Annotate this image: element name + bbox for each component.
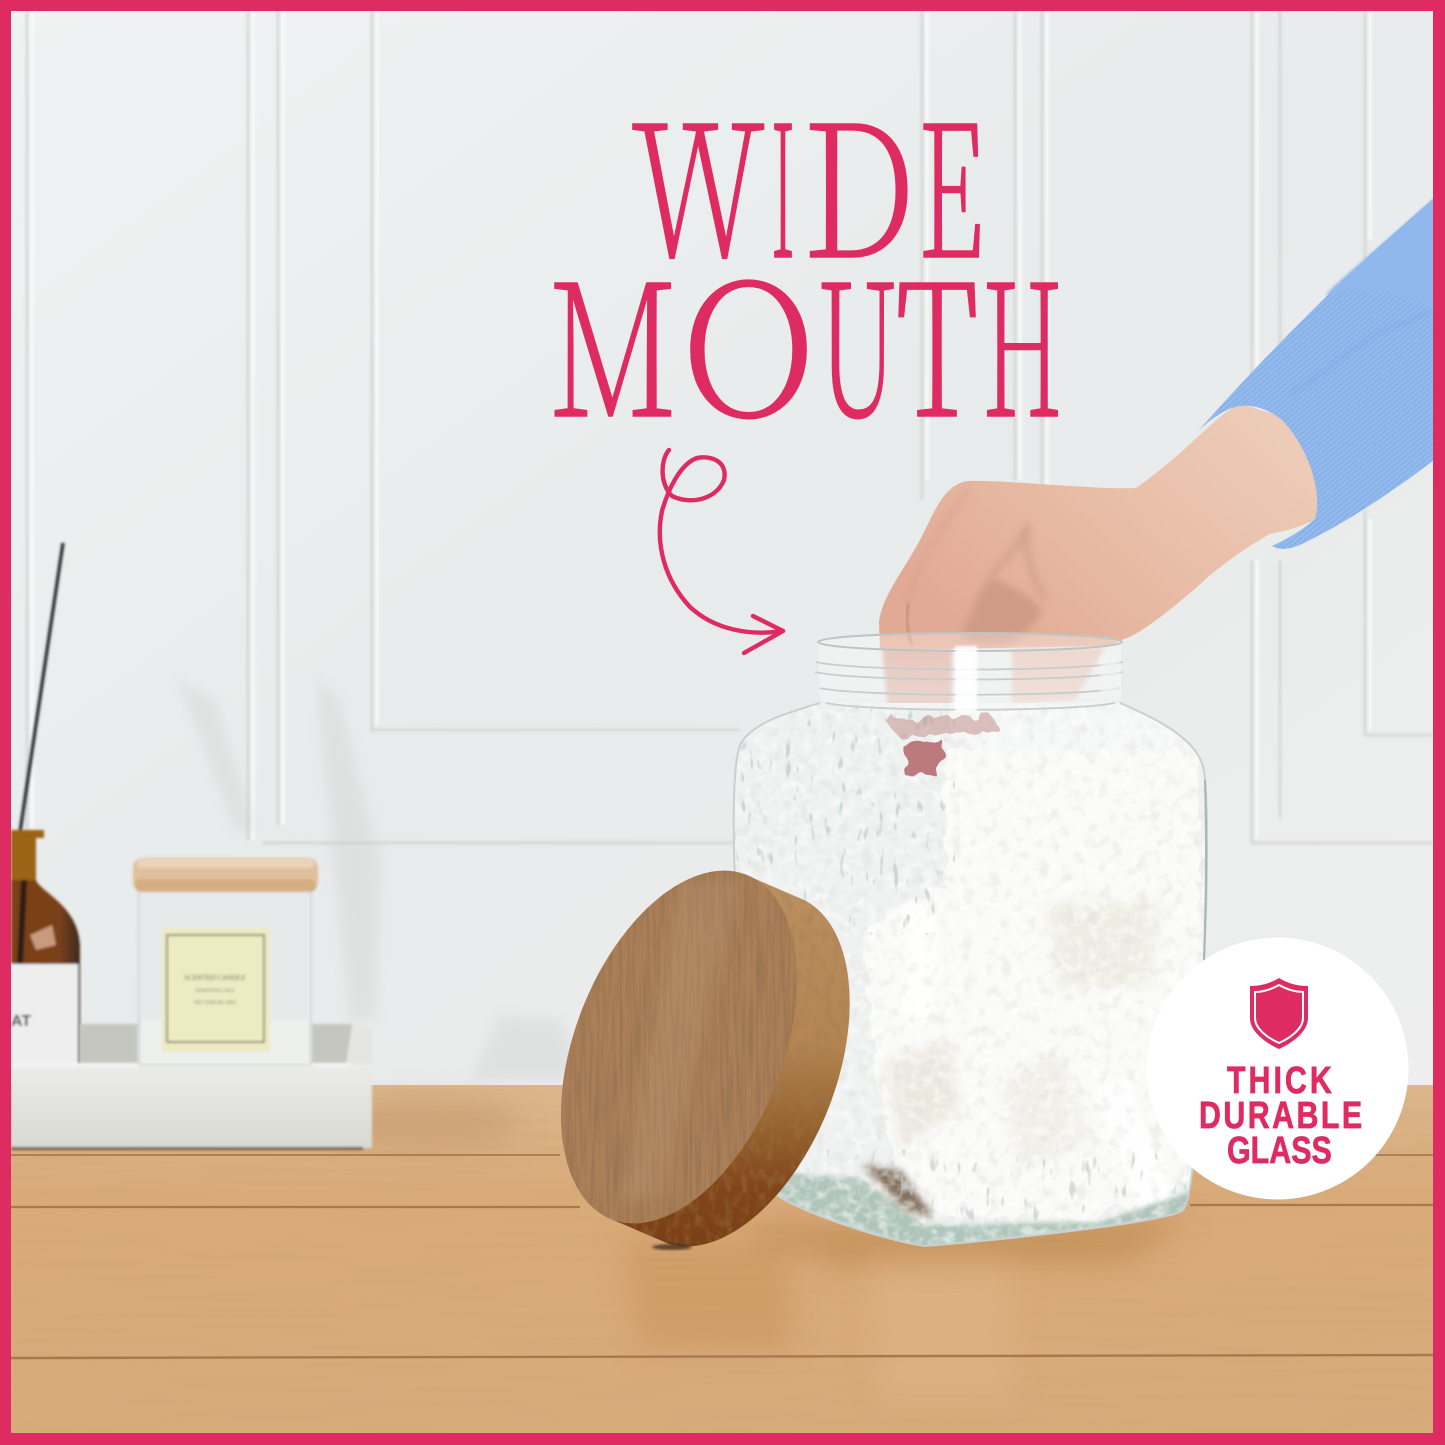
title: wide mouth xyxy=(549,45,1063,469)
icon: shield xyxy=(1250,978,1308,1049)
wooden table xyxy=(0,1085,1445,1445)
jar glass base xyxy=(768,1172,1195,1250)
title line: mouth: T xyxy=(896,204,978,469)
lid rim xyxy=(611,878,850,1246)
title line: wide: W xyxy=(631,45,765,310)
badge text: DURABLE xyxy=(1199,1095,1362,1137)
table shadow and reflections xyxy=(340,1101,1190,1400)
glass jar xyxy=(725,632,1215,1260)
title line: mouth: M xyxy=(549,204,678,469)
wall background xyxy=(0,0,1445,1090)
jar neck with threads xyxy=(815,632,1123,712)
candle label: ESSENTIAL OILS xyxy=(196,989,235,994)
badge text: GLASS xyxy=(1227,1130,1332,1172)
title line: wide: E xyxy=(918,45,984,310)
badge text xyxy=(1199,1060,1362,1172)
jar hammered texture xyxy=(725,700,1215,1260)
candle label: NET WEIGHT 200G xyxy=(194,1001,237,1006)
jar body xyxy=(725,690,1215,1260)
candle label: SCENTED CANDLE xyxy=(184,974,246,982)
refracted finger xyxy=(902,742,945,778)
candle label xyxy=(162,928,270,1052)
hand reaching into jar xyxy=(879,404,1330,712)
title line: wide: I xyxy=(771,45,795,310)
lid face xyxy=(561,870,797,1224)
title line: wide: D xyxy=(802,45,916,310)
blue sweater sleeve xyxy=(1198,198,1434,549)
title line: wide xyxy=(631,45,984,310)
title line: mouth: U xyxy=(817,204,898,469)
badge text: THICK xyxy=(1227,1060,1332,1102)
bottle label: AT xyxy=(11,1013,31,1030)
bottle label xyxy=(11,964,78,1065)
badge: thick durable glass xyxy=(1146,938,1408,1200)
candle tray xyxy=(11,1024,372,1150)
fingers seen through the neck xyxy=(882,648,1105,712)
scented candle xyxy=(133,858,318,1065)
diffuser bottle xyxy=(11,543,80,1065)
wooden lid xyxy=(561,870,850,1251)
jar contents: white cotton pads xyxy=(862,750,1200,1220)
title line: mouth: H xyxy=(982,204,1063,469)
title line: mouth: O xyxy=(680,204,817,469)
title line: mouth xyxy=(549,204,1063,469)
arrow pointing to jar mouth xyxy=(660,450,783,653)
